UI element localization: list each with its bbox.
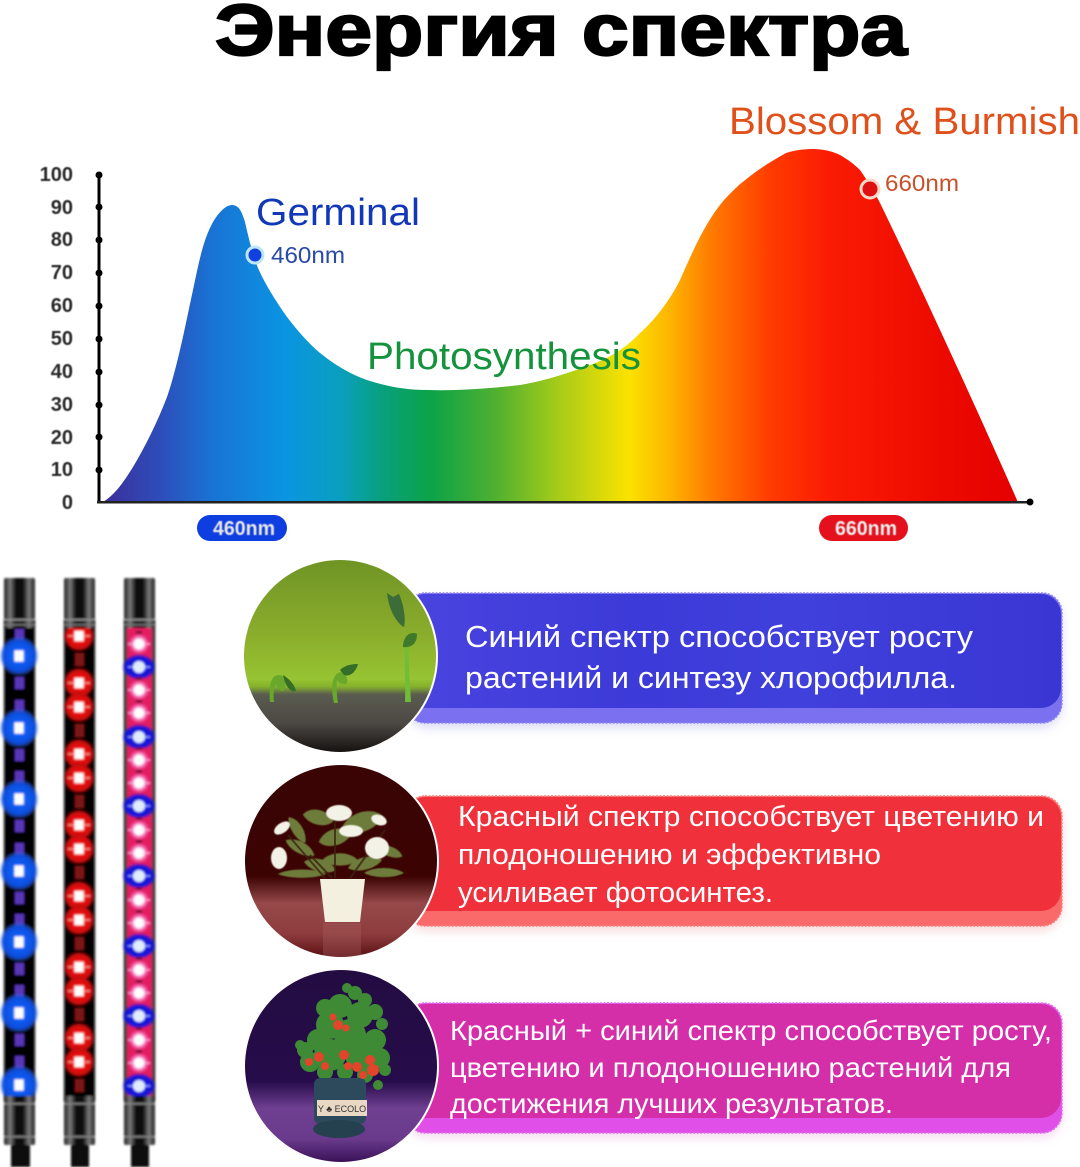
text: red spectrum: Красный спектр способствует цветению и — [458, 801, 1044, 833]
y axis labels: 0 — [62, 492, 73, 514]
panel: red spectrum — [405, 796, 1062, 931]
text: blue spectrum: растений и синтезу хлорофилла. — [465, 660, 957, 695]
text: blue spectrum — [465, 619, 974, 695]
y axis labels: 30 — [51, 394, 73, 416]
y axis labels: 10 — [51, 459, 73, 481]
lamp strip: blue — [0, 578, 39, 1167]
photo: tomato plant: Y ♣ ECOLO — [318, 1104, 366, 1114]
spectrum curve area — [103, 149, 1017, 502]
y axis labels: 100 — [40, 164, 73, 186]
y axis labels: 90 — [51, 197, 73, 219]
marker: 660nm: 660nm — [885, 170, 959, 196]
label: Photosynthesis: Photosynthesis — [367, 336, 641, 378]
photo: seedlings — [242, 558, 438, 754]
lamp strip: mixed — [122, 578, 156, 1167]
text: red spectrum: плодоношению и эффективно — [458, 839, 881, 871]
text: blue spectrum: Синий спектр способствует росту — [465, 619, 974, 654]
text: red spectrum — [458, 801, 1044, 909]
y axis labels: 40 — [51, 361, 73, 383]
lamp strip: red — [63, 578, 95, 1167]
y axis labels — [40, 164, 73, 514]
photo: tomato plant — [243, 968, 439, 1164]
text: red plus blue spectrum: Красный + синий спектр способствует росту, — [450, 1015, 1052, 1046]
marker: 660nm — [861, 170, 959, 198]
text: red plus blue spectrum — [450, 1015, 1052, 1119]
badge: 660nm — [819, 515, 908, 541]
label: Blossom & Burmish: Blossom & Burmish — [729, 101, 1080, 143]
y axis labels: 80 — [51, 229, 73, 251]
badge: 660nm: 660nm — [835, 518, 897, 540]
text: red plus blue spectrum: цветению и плодоношению растений для — [450, 1052, 1011, 1083]
y axis labels: 70 — [51, 262, 73, 284]
y axis — [96, 172, 102, 503]
y axis labels: 50 — [51, 328, 73, 350]
y axis labels: 20 — [51, 427, 73, 449]
badge: 460nm: 460nm — [213, 518, 275, 540]
badge: 460nm — [197, 515, 287, 541]
y axis labels: 60 — [51, 295, 73, 317]
photo: flowering plant — [243, 763, 439, 959]
text: red plus blue spectrum: достижения лучших результатов. — [450, 1088, 893, 1119]
panel: blue spectrum — [405, 593, 1062, 728]
marker: 460nm: 460nm — [271, 242, 345, 268]
x axis — [97, 498, 1034, 506]
label: Germinal: Germinal — [256, 192, 420, 234]
text: red spectrum: усиливает фотосинтез. — [458, 877, 773, 909]
spectrum chart — [40, 101, 1080, 541]
panel: red plus blue spectrum — [405, 1003, 1062, 1138]
